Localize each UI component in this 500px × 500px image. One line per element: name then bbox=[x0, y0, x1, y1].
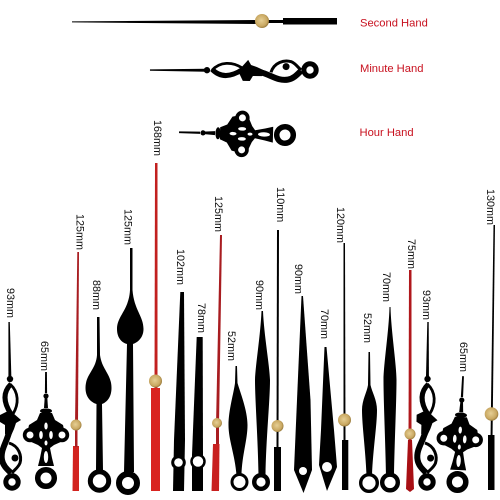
hand: taper 102mm bbox=[173, 292, 185, 491]
length labels: 120mm bbox=[334, 207, 346, 243]
length labels: 65mm bbox=[38, 341, 50, 371]
hand: red 168mm bbox=[149, 163, 162, 491]
length labels: 125mm bbox=[122, 209, 134, 245]
hand: red 125mm second bbox=[212, 235, 222, 491]
hand: black 120mm bbox=[338, 243, 351, 490]
hour hand (top) bbox=[178, 109, 294, 158]
hand: spear 90mm bbox=[294, 296, 312, 493]
length labels: 90mm bbox=[292, 264, 304, 294]
hand: spade 88mm bbox=[86, 317, 112, 490]
length labels: 78mm bbox=[195, 303, 207, 333]
hand: red 75mm bbox=[404, 270, 416, 492]
hand: fleur 65mm right bbox=[434, 375, 486, 492]
length labels: 65mm bbox=[457, 342, 469, 372]
hand: ornate 93mm bbox=[0, 322, 21, 488]
hand: ornate 93mm right bbox=[415, 322, 440, 488]
length labels: 93mm bbox=[4, 288, 16, 318]
hand: black 110mm bbox=[272, 230, 284, 491]
hand: fleur 65mm bbox=[23, 372, 69, 486]
length labels: 168mm bbox=[151, 120, 163, 156]
hand: leaf 90mm bbox=[254, 311, 270, 489]
hand: spear 70mm bbox=[319, 347, 337, 491]
length labels: 88mm bbox=[90, 280, 102, 310]
length labels: 75mm bbox=[405, 239, 417, 269]
label: Second Hand: Second Hand bbox=[360, 18, 428, 30]
length labels: 70mm bbox=[318, 309, 330, 339]
hand: taper 78mm bbox=[192, 337, 204, 491]
length labels: 125mm bbox=[212, 196, 224, 232]
length labels: 102mm bbox=[174, 249, 186, 285]
length labels: 93mm bbox=[420, 290, 432, 320]
hand: leaf 70mm bbox=[382, 307, 398, 490]
hand: black 130mm bbox=[485, 225, 498, 490]
minute hand (top) bbox=[150, 58, 316, 82]
hand: spade 125mm bbox=[117, 248, 144, 492]
length labels: 130mm bbox=[484, 189, 496, 225]
length labels: 110mm bbox=[274, 187, 286, 222]
label: Minute Hand: Minute Hand bbox=[360, 63, 423, 75]
label: Hour Hand: Hour Hand bbox=[360, 127, 414, 139]
hand: leaf 52mm bbox=[228, 366, 248, 490]
length labels: 90mm bbox=[253, 280, 265, 310]
length labels bbox=[4, 120, 496, 372]
length labels: 125mm bbox=[74, 214, 86, 250]
hand: leaf 52mm second bbox=[361, 352, 377, 491]
length labels: 52mm bbox=[361, 313, 373, 343]
second hand (top) bbox=[72, 14, 337, 28]
length labels: 70mm bbox=[380, 272, 392, 302]
hand: red 125mm bbox=[70, 252, 82, 491]
length labels: 52mm bbox=[225, 331, 237, 361]
